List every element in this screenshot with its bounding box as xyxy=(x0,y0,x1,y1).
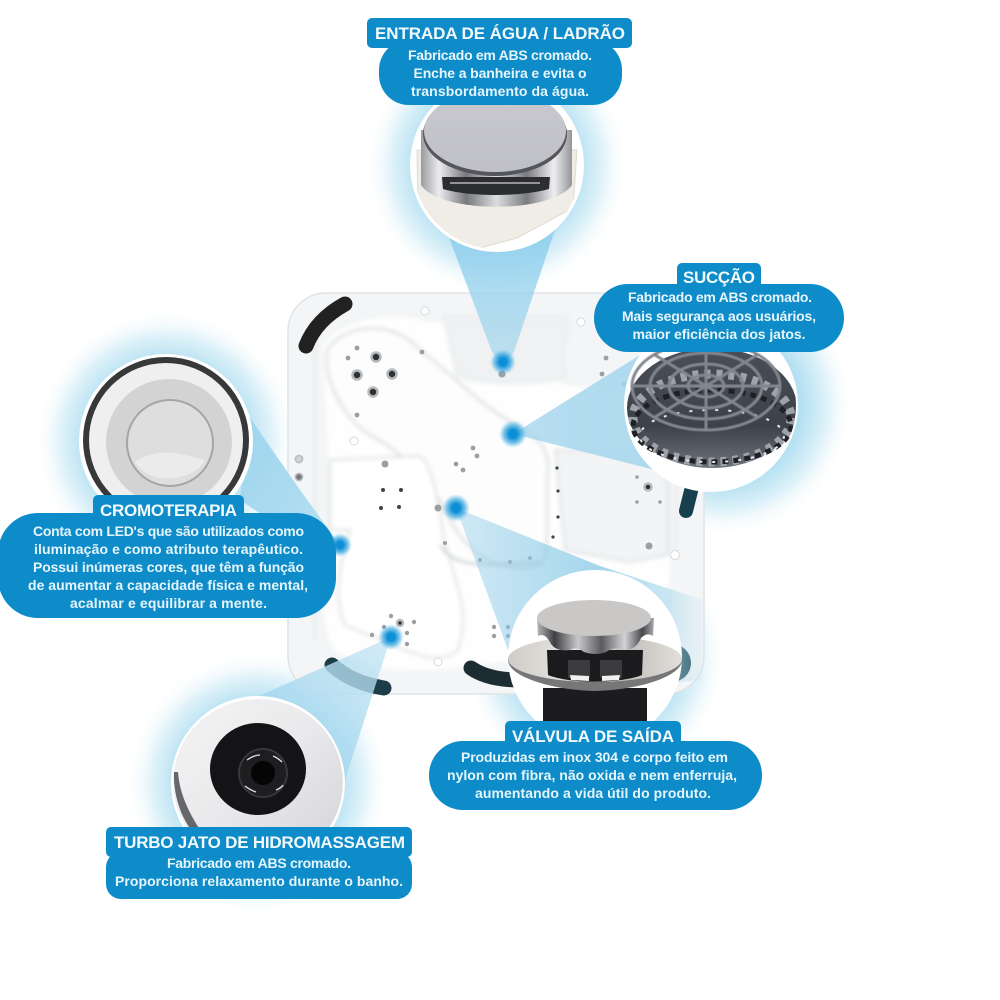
headrest: bottom right xyxy=(653,644,691,682)
beam: suction xyxy=(513,355,655,470)
nozzle xyxy=(239,749,287,797)
callout: water inlet: Enche a banheira e evita o xyxy=(414,65,586,81)
callout: drain valve xyxy=(429,721,762,810)
detail circle: chromotherapy light xyxy=(79,354,253,495)
hexagonal white nut xyxy=(417,150,577,248)
hot tub seen from above xyxy=(288,293,704,694)
grid fins xyxy=(633,374,791,462)
callout: chromotherapy: Possui inúmeras cores, que têm a função xyxy=(33,559,304,575)
callout: water inlet: Fabricado em ABS cromado. xyxy=(408,47,592,63)
flange plate xyxy=(508,640,682,691)
callout: chromotherapy: de aumentar a capacidade física e mental, xyxy=(28,577,308,593)
detail circle: turbo jet xyxy=(171,696,345,827)
headrest: bottom left xyxy=(332,665,384,688)
callout: drain valve: Produzidas em inox 304 e corpo feito em xyxy=(461,749,728,765)
glow halos behind detail circles xyxy=(34,33,854,915)
black collar with windows xyxy=(547,650,643,682)
beam: turbo jet xyxy=(250,637,391,780)
headrest: right xyxy=(686,491,691,511)
callout: chromotherapy: acalmar e equilibrar a mente. xyxy=(70,595,267,611)
light lens xyxy=(127,400,213,486)
callout: drain valve: aumentando a vida útil do produto. xyxy=(475,785,711,801)
callout: water inlet xyxy=(367,18,632,105)
knob top xyxy=(537,600,651,636)
beam: chromotherapy xyxy=(240,415,340,560)
callout: chromotherapy: iluminação e como atributo terapêutico. xyxy=(34,541,303,557)
callout: suction: Fabricado em ABS cromado. xyxy=(628,289,812,305)
detail circle: water inlet fitting xyxy=(410,105,584,252)
headrest: bottom centre xyxy=(471,668,520,680)
callout: suction: Mais segurança aos usuários, xyxy=(622,308,816,324)
callout: suction: SUCÇÃO xyxy=(683,267,755,287)
callout: turbo jet: Proporciona relaxamento durante o banho. xyxy=(115,873,403,889)
overflow slot xyxy=(442,177,550,195)
chrome ring xyxy=(173,699,343,827)
infographic: hot tub components xyxy=(0,18,844,902)
threaded black body xyxy=(543,688,647,721)
callout: chromotherapy xyxy=(0,495,336,618)
callout: water inlet: transbordamento da água. xyxy=(411,83,589,99)
black housing xyxy=(210,723,306,815)
callout: suction: maior eficiência dos jatos. xyxy=(632,326,806,342)
callout: drain valve: VÁLVULA DE SAÍDA xyxy=(512,727,674,746)
callout: chromotherapy: Conta com LED's que são utilizados como xyxy=(33,523,304,539)
callout: turbo jet: TURBO JATO DE HIDROMASSAGEM xyxy=(114,833,405,852)
callout: chromotherapy: CROMOTERAPIA xyxy=(100,501,237,520)
scalloped knob xyxy=(537,618,654,654)
concentric ribs xyxy=(632,342,780,430)
massage jets xyxy=(294,307,680,666)
detail circle: drain valve xyxy=(508,570,682,721)
detail circle: suction cover xyxy=(624,352,798,492)
callout: water inlet: ENTRADA DE ÁGUA / LADRÃO xyxy=(375,23,625,43)
beam: drain valve xyxy=(456,508,703,690)
callout: turbo jet: Fabricado em ABS cromado. xyxy=(167,855,351,871)
tub basin contours xyxy=(315,316,676,670)
glowing markers xyxy=(328,349,527,650)
callout: turbo jet xyxy=(106,827,412,899)
black gasket ring xyxy=(83,357,249,495)
chrome cap body xyxy=(421,130,572,207)
callout: drain valve: nylon com fibra, não oxida e nem enferruja, xyxy=(447,767,737,783)
cap top xyxy=(423,122,567,176)
headrest: top left xyxy=(306,304,345,346)
light bezel xyxy=(106,379,232,505)
callout: suction xyxy=(594,263,844,352)
beam: water inlet xyxy=(435,200,565,365)
